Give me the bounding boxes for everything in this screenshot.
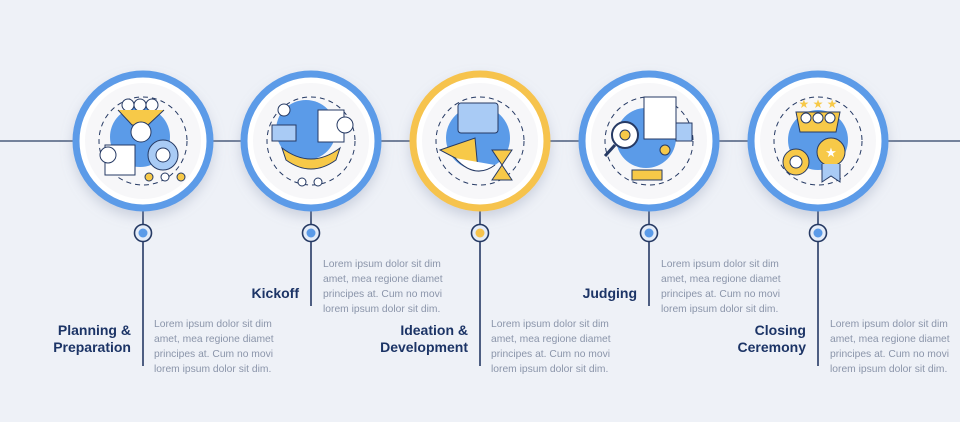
title: Closing Ceremony: Closing (755, 322, 806, 338)
title: Ideation & Development: Development (380, 339, 468, 355)
text: judging: Lorem ipsum dolor sit dim amet, mea regione diamet principes at. Cum no movi lorem ipsum dolor sit dim. (661, 259, 781, 315)
title: Ideation & Development: Ideation & (400, 322, 468, 338)
circle 5: closing: ★ (825, 145, 837, 160)
title: Planning & Preparation: Planning & (58, 322, 131, 338)
text: ideation: Lorem ipsum dolor sit dim amet, mea regione diamet principes at. Cum no movi lorem ipsum dolor sit dim. (491, 319, 611, 375)
title: Planning & Preparation (53, 322, 131, 355)
dots (134, 224, 826, 242)
title: Judging: Judging (583, 285, 637, 301)
title: Closing Ceremony: Ceremony (738, 339, 806, 355)
circle 5: closing: ★ ★ ★ (799, 97, 837, 111)
text: closing: Lorem ipsum dolor sit dim amet, mea regione diamet principes at. Cum no movi lorem ipsum dolor sit dim. (830, 319, 950, 375)
title: Planning & Preparation: Preparation (53, 339, 131, 355)
circle 2: kickoff (244, 74, 378, 208)
text: kickoff: Lorem ipsum dolor sit dim amet, mea regione diamet principes at. Cum no movi lorem ipsum dolor sit dim. (323, 259, 443, 315)
circle 1: planning (76, 74, 210, 208)
circle 4: judging (582, 74, 716, 208)
title: Kickoff: Kickoff (252, 285, 299, 301)
circle 3: ideation (413, 74, 547, 208)
title: Closing Ceremony (738, 322, 806, 355)
title: Ideation & Development (380, 322, 468, 355)
circle 5: closing (751, 74, 885, 208)
text: planning: Lorem ipsum dolor sit dim amet, mea regione diamet principes at. Cum no movi lorem ipsum dolor sit dim. (154, 319, 274, 375)
